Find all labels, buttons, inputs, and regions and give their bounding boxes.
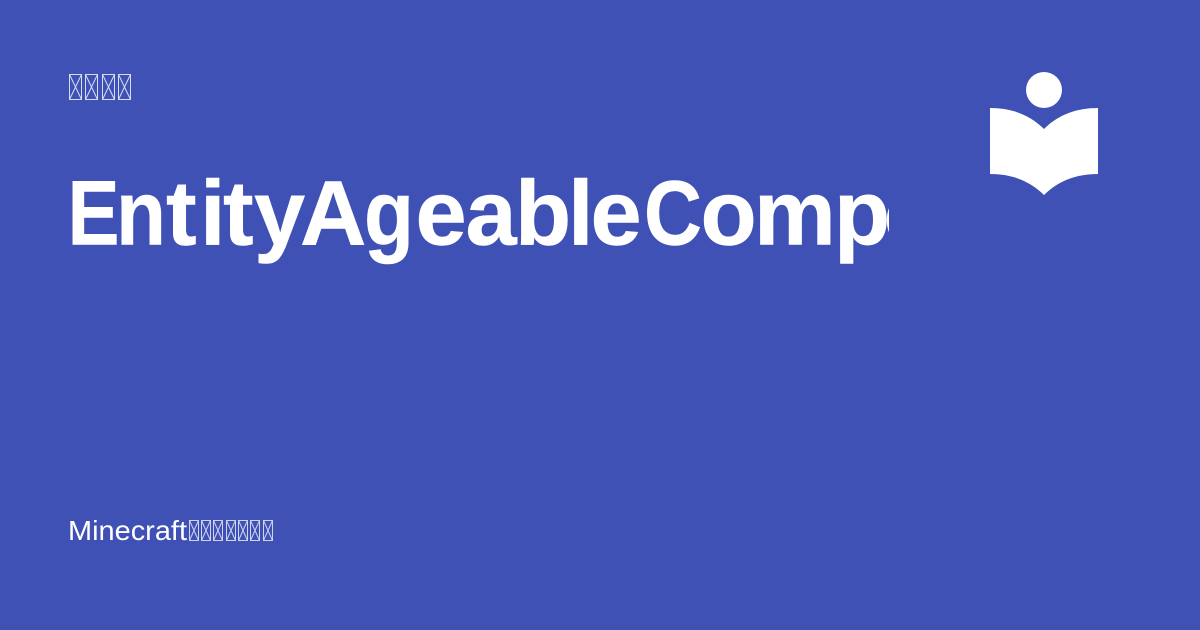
icon: reader with open book xyxy=(990,72,1098,195)
site name: Minecraft xyxy=(68,515,187,546)
title clipped at right edge: g xyxy=(364,162,414,264)
site name xyxy=(68,515,272,546)
category label: missing-glyph boxes xyxy=(70,74,130,100)
card background xyxy=(69,72,1098,541)
title clipped at right edge xyxy=(72,178,889,264)
title clipped at right edge: tityA xyxy=(166,162,366,264)
title clipped at right edge: E xyxy=(68,162,120,264)
site name: missing-glyph boxes xyxy=(190,520,272,540)
title clipped at right edge: n xyxy=(116,162,166,264)
title clipped at right edge: eable xyxy=(416,162,642,264)
title clipped at right edge: C xyxy=(644,162,702,264)
title clipped at right edge: ompo xyxy=(700,162,940,264)
